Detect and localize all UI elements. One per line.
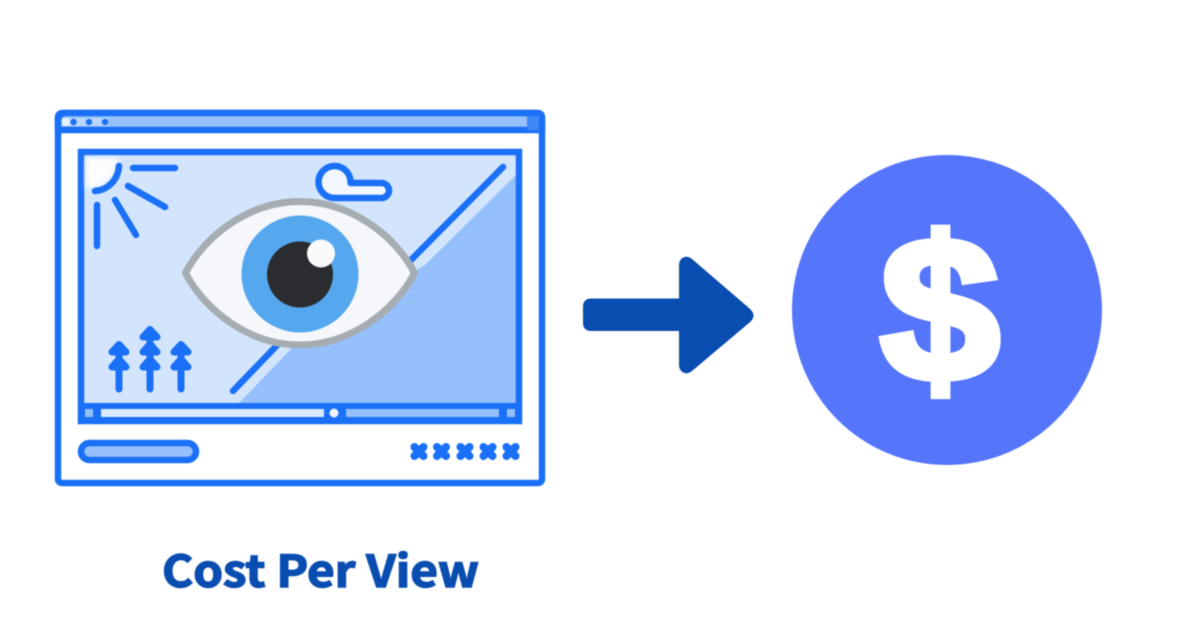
video panel background [81, 152, 519, 404]
arrow [583, 257, 754, 373]
icon: cloud [319, 166, 389, 198]
title: Cost Per View [162, 536, 479, 600]
icon: trees [112, 330, 188, 389]
icon: eye [186, 202, 414, 345]
icon: dollar coin [792, 155, 1102, 465]
dollar sign: $ [880, 197, 1000, 424]
video panel frame [81, 152, 519, 421]
progress pill [81, 443, 196, 460]
rating crosses [414, 447, 516, 456]
browser window frame [58, 113, 542, 483]
icon: sun [86, 158, 175, 246]
video player bar [81, 403, 519, 421]
diagonal reflection line [233, 167, 503, 391]
icon: browser window with video [58, 113, 542, 483]
